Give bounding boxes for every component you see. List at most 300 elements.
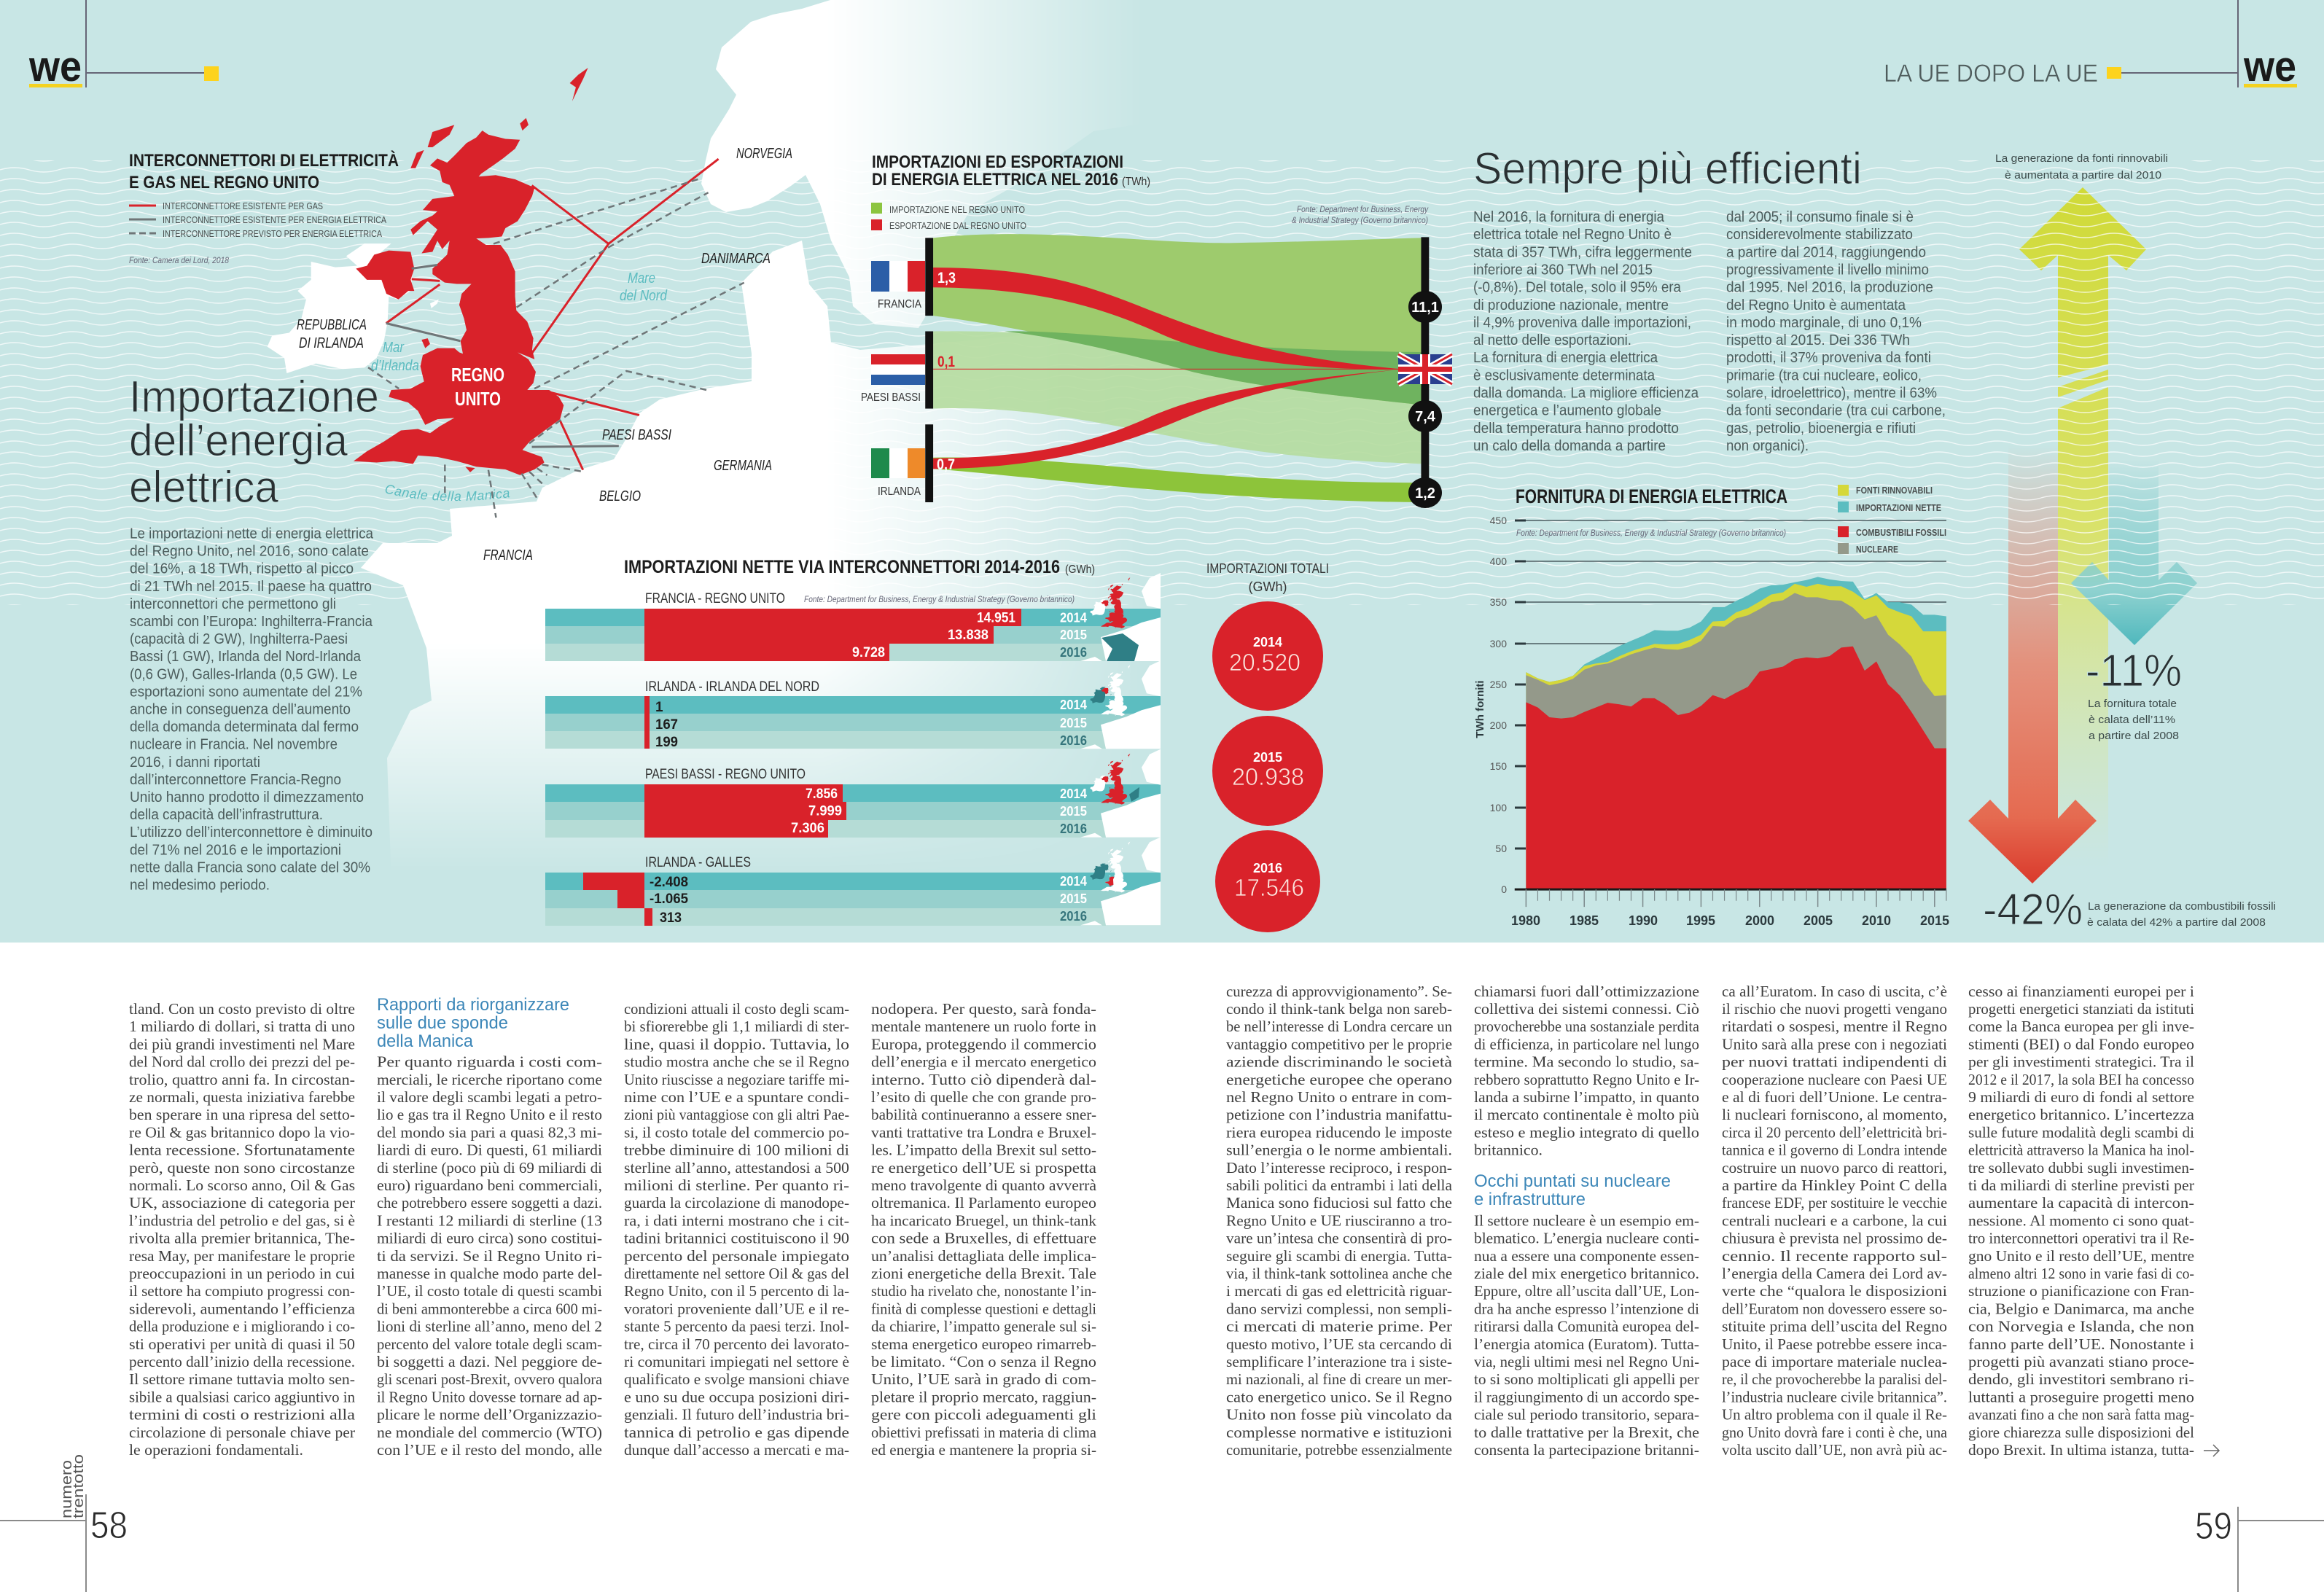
bar group: Irlanda - Galles: -2.408: [650, 875, 688, 890]
text column 8: ti da miliardi di sterline previsti per: [1968, 1177, 2194, 1194]
text column 2: l’UE, il costo totale di questi scambi: [377, 1282, 602, 1300]
text column 2: che potrebbero essere soggetti a dazi.: [377, 1194, 602, 1211]
text column 8: sulle future modalità degli scambi di: [1968, 1123, 2194, 1141]
header left: logo and rule: we: [28, 43, 82, 90]
title: Importazione dell'energia elettrica: [129, 372, 379, 512]
text block: efficiency column 1: è esclusivamente determinata: [1473, 367, 1656, 383]
bar group: Francia - Regno Unito: 2016: [1060, 645, 1087, 660]
callout: minus 11 percent: a partire dal 2008: [2089, 730, 2179, 742]
text column 1: lenta recessione. Sfortunatamente: [129, 1142, 355, 1159]
text block: left intro paragraph: Unito hanno prodotto il dimezzamento: [130, 789, 364, 805]
map heading and legend: interconnectors: E GAS NEL REGNO UNITO: [129, 173, 319, 192]
text column 4: finità di complesse questioni e dettagli: [871, 1300, 1096, 1317]
text column 8: dopo Brexit. In ultima istanza, tutta-: [1968, 1441, 2194, 1459]
text block: efficiency column 1: un calo della domanda a partire: [1473, 438, 1666, 454]
text column 7: centrali nucleari e a carbone, la cui: [1722, 1211, 1947, 1229]
text column 4: les. L’impatto della Brexit sul setto-: [871, 1142, 1096, 1159]
bar group: Irlanda - Irlanda del Nord: 2016: [1060, 733, 1087, 748]
text column 6 lower: blematico. L’energia nucleare conti-: [1474, 1230, 1699, 1247]
text column 3: ri comunitari impiegati nel settore è: [624, 1353, 849, 1370]
total badges: right axis: [1408, 291, 1442, 508]
text column 7: cooperazione nucleare con Paesi UE: [1722, 1071, 1947, 1088]
text block: left intro paragraph: del 16%, a 18 TWh, rispetto al picco: [130, 561, 354, 577]
map labels: countries and seas: NORVEGIA: [736, 146, 792, 162]
flag: Ireland: IRLANDA: [878, 485, 921, 498]
text column 6 lower: to dalle trattative per la Brexit, che: [1474, 1424, 1699, 1441]
text column 8: progetti energetici stanziati da istituti: [1968, 1000, 2194, 1018]
text block: efficiency column 2: solare, idroelettrico), mentre il 63%: [1726, 385, 1937, 401]
sankey heading and legend: IMPORTAZIONE NEL REGNO UNITO: [889, 204, 1025, 215]
map heading and legend: interconnectors: INTERCONNETTORE ESISTENTE PER ENERGIA ELETTRICA: [163, 214, 386, 225]
x axis labels: 1995: [1686, 913, 1715, 928]
bar group: Irlanda - Galles: -1.065: [650, 891, 688, 907]
text block: efficiency column 2: progressivamente il livello minimo: [1726, 262, 1929, 278]
text column 8: elettricità attraverso la Manica ha inol-: [1968, 1142, 2194, 1159]
text column 4: re energetico dell’UE si prospetta: [871, 1159, 1096, 1177]
text column 7: Unito, il Paese potrebbe essere inca-: [1722, 1335, 1947, 1353]
text block: efficiency column 1: il 4,9% proveniva dalle importazioni,: [1473, 315, 1691, 331]
circle 2016: 2016: [1253, 861, 1282, 875]
text block: left intro paragraph: scambi con l’Europa: Inghilterra-Francia: [130, 614, 373, 630]
text column 3: studio mostra anche che se il Regno: [624, 1053, 849, 1071]
text column 1: rivolta alla premier britannica, The-: [129, 1230, 355, 1247]
text block: efficiency column 1: al netto delle esportazioni.: [1473, 332, 1631, 348]
text column 1: tland. Con un costo previsto di oltre: [129, 1000, 355, 1018]
page footer left: folio 58: trentotto: [71, 1454, 87, 1518]
flag: France: FRANCIA: [878, 298, 921, 311]
text block: efficiency column 2: considerevolmente stabilizzato: [1726, 227, 1913, 243]
sankey flows: [925, 234, 1429, 508]
sankey heading and legend: IMPORTAZIONI ED ESPORTAZIONI: [872, 152, 1123, 172]
sankey values: 0,7: [937, 456, 955, 473]
panel: total imports circles: IMPORTAZIONI TOTALI: [1206, 561, 1329, 576]
header right: section title and logo: we: [2243, 43, 2296, 90]
text column 5: Manica sono fiduciosi sul fatto che: [1226, 1194, 1452, 1211]
total badges: right axis: 1,2: [1415, 485, 1435, 502]
text column 2: con l’UE e il resto del mondo, alle: [377, 1441, 602, 1459]
map labels: countries and seas: PAESI BASSI: [602, 427, 671, 443]
map labels: countries and seas: d’Irlanda: [371, 358, 419, 374]
x axis labels: [1511, 913, 1949, 928]
map labels: countries and seas: BELGIO: [599, 488, 641, 504]
text column 4: Unito, l’UE sarà in grado di com-: [871, 1370, 1096, 1388]
text column 1: l’industria del petrolio e del gas, si è: [129, 1211, 355, 1229]
bar group: Irlanda - Galles: 313: [660, 910, 682, 926]
text column 3: guarda la circolazione di manodope-: [624, 1194, 849, 1211]
panel: total imports circles: [1206, 561, 1329, 932]
bar group: Irlanda - Irlanda del Nord: [545, 660, 1161, 750]
title: Importazione dell'energia elettrica: dell’energia: [129, 415, 348, 465]
bar group: Francia - Regno Unito: 14.951: [977, 611, 1015, 625]
circle 2015: [1212, 716, 1323, 826]
text column 3: e uno su due occupa posizioni diri-: [624, 1388, 849, 1405]
sankey heading and legend: Fonte: Department for Business, Energy: [1297, 204, 1429, 214]
text column 4: con sede a Bruxelles, di effettuare: [871, 1230, 1096, 1247]
text block: efficiency column 2: dal 1995. Nel 2016, la produzione: [1726, 280, 1933, 296]
text column 5: mi nazionali, al fine di creare un mer-: [1226, 1370, 1452, 1388]
text column 8: 9 miliardi di euro di fondi al settore: [1968, 1088, 2194, 1106]
sankey values: 1,3: [937, 270, 956, 286]
text block: left intro paragraph: esportazioni sono aumentate del 21%: [130, 684, 362, 700]
text column 4: studio ha rivelato che, nonostante l’in-: [871, 1282, 1096, 1300]
circle 2016: 17.546: [1234, 874, 1304, 901]
text block: left intro paragraph: nucleare in Francia. Nel novembre: [130, 737, 338, 753]
bar group: Irlanda - Irlanda del Nord: 167: [655, 717, 678, 733]
text block: left intro paragraph: dall’interconnettore Francia-Regno: [130, 772, 341, 788]
bar group: Irlanda - Irlanda del Nord: IRLANDA - IRLANDA DEL NORD: [645, 679, 819, 695]
flag: United Kingdom: [1398, 354, 1452, 384]
x axis labels: 2000: [1745, 913, 1774, 928]
text column 1: UK, associazione di categoria per: [129, 1194, 355, 1211]
text block: left intro paragraph: del Regno Unito, nel 2016, sono calate: [130, 544, 369, 560]
text column 8: almeno altri 12 sono in varie fasi di co-: [1968, 1265, 2194, 1282]
text column 3: ra, i dati interni mostrano che i cit-: [624, 1211, 849, 1229]
circle 2016: [1215, 830, 1320, 932]
panel: Sankey imports and exports 2016: [861, 152, 1452, 508]
panel: total imports circles: (GWh): [1248, 580, 1287, 594]
text column 8: struzione o pianificazione con Fran-: [1968, 1282, 2194, 1300]
text column 1: resa May, per manifestare le proprie: [129, 1247, 355, 1265]
text column 7: li nucleari forniscono, al momento,: [1722, 1106, 1947, 1123]
text block: efficiency column 2: [1726, 209, 1946, 454]
text block: efficiency column 2: in modo marginale, di uno 0,1%: [1726, 315, 1922, 331]
chart heading and source: Fonte: Department for Business, Energy & Industrial Strategy (Governo britannico): [1516, 528, 1786, 538]
callout: minus 42 percent: La generazione da combustibili fossili: [2088, 900, 2276, 913]
panel: net imports via interconnectors bar chart: [545, 557, 1161, 926]
text column 8: tro interconnettori operativi tra il Re-: [1968, 1230, 2194, 1247]
callout: minus 11 percent: [2086, 646, 2182, 742]
text column 3: direttamente nel settore Oil & gas del: [624, 1265, 849, 1282]
x axis labels: 1985: [1570, 913, 1599, 928]
text block: efficiency column 2: primarie (tra cui nucleare, eolico,: [1726, 367, 1922, 383]
text column 6 lower: nua a essere una componente essen-: [1474, 1247, 1699, 1265]
chart legend: [1838, 485, 1946, 555]
bar group: Paesi Bassi - Regno Unito: 7.856: [806, 787, 838, 802]
text block: efficiency column 2: a partire dal 2014, raggiungendo: [1726, 244, 1926, 260]
chart legend: COMBUSTIBILI FOSSILI: [1856, 527, 1946, 538]
chart heading and source: [1516, 485, 1787, 538]
text column 1: ben sperare in una ripresa del setto-: [129, 1106, 355, 1123]
text column 4: da chiarire, l’impatto generale sul si-: [871, 1318, 1096, 1335]
text column 7: circa il 20 percento dell’elettricità bri-: [1722, 1123, 1947, 1141]
page footer left: folio 58: [0, 1454, 128, 1592]
text column 8: stimenti (BEI) o dal Fondo europeo: [1968, 1035, 2194, 1053]
bar group: Irlanda - Irlanda del Nord: 2015: [1060, 716, 1087, 730]
text block: efficiency column 1: stata di 357 TWh, cifra leggermente: [1473, 244, 1692, 260]
text column 5: aziende discriminando le società: [1226, 1053, 1453, 1071]
map heading and legend: interconnectors: [129, 150, 399, 265]
text column 6 lower: ziale del mix energetico britannico.: [1474, 1265, 1699, 1282]
text column 7: ritardati o sospesi, mentre il Regno: [1722, 1018, 1947, 1035]
text column 6 lower: ciale sul periodo transitorio, separa-: [1474, 1406, 1699, 1424]
text block: efficiency column 2: rispetto al 2015. Dei 336 TWh: [1726, 332, 1910, 348]
text column 8: giore chiarezza sulle disposizioni del: [1968, 1424, 2194, 1441]
text column 3: voratori proveniente dall’UE e il re-: [624, 1300, 849, 1317]
text column 5: be nell’interesse di Londra cercare un: [1226, 1018, 1452, 1035]
text column 7: e al di fuori dell’Unione. Le centra-: [1722, 1088, 1947, 1106]
text column 2: gli scenari post-Brexit, ovvero qualora: [377, 1370, 602, 1388]
section heading: Rapporti da riorganizzare: Rapporti da riorganizzare: [377, 995, 569, 1015]
flag: Netherlands: [861, 354, 925, 404]
text column 8: con Norvegia e Islanda, che non: [1968, 1318, 2194, 1335]
text column 6 upper: britannico.: [1474, 1142, 1543, 1159]
text column 4: ed energia e mantenere la propria si-: [871, 1441, 1096, 1459]
text column 5: cato energetico unico. Se il Regno: [1226, 1388, 1452, 1405]
text column 5: vare un’intesa che consentirà di pro-: [1226, 1230, 1452, 1247]
flag: Netherlands: PAESI BASSI: [861, 391, 921, 404]
text column 7: il rischio che nuovi progetti vengano: [1722, 1000, 1947, 1018]
y axis labels: 450: [1490, 515, 1507, 526]
sankey heading and legend: & Industrial Strategy (Governo britannico): [1292, 215, 1428, 225]
text column 3: condizioni attuali il costo degli scam-: [624, 1000, 849, 1018]
callout: minus 11 percent: è calata dell’11%: [2089, 714, 2175, 726]
text column 8: per gli investimenti strategici. Tra il: [1968, 1053, 2194, 1071]
text column 5: semplificare l’interazione tra i siste-: [1226, 1353, 1452, 1370]
bar group: Francia - Regno Unito: [545, 573, 1161, 661]
y axis labels: [1474, 515, 1507, 895]
text column 6 lower: to si sono moltiplicati gli appelli per: [1474, 1370, 1699, 1388]
callout: minus 42 percent: è calata del 42% a partire dal 2008: [2087, 916, 2266, 929]
text block: efficiency column 1: (-0,8%). Del totale, solo il 95% era: [1473, 280, 1682, 296]
map labels: countries and seas: UNITO: [455, 388, 501, 410]
text column 6 lower: consenta la partecipazione britanni-: [1474, 1441, 1699, 1459]
text column 6 lower: il raggiungimento di un accordo spe-: [1474, 1388, 1699, 1405]
text column 3: zioni più vantaggiose con gli altri Pae-: [624, 1106, 849, 1123]
text column 3: milioni di sterline. Per quanto ri-: [624, 1177, 849, 1194]
text column 6 lower: ritirarsi dalla Comunità europea del-: [1474, 1318, 1699, 1335]
text column 3: dunque dall’accesso a mercati e ma-: [624, 1441, 849, 1459]
text column 3: percento del personale impiegato: [624, 1247, 849, 1265]
text column 2: [377, 1053, 602, 1459]
text column 2: miliardi di euro circa) sono costitui-: [377, 1230, 602, 1247]
sankey heading and legend: (TWh): [1122, 176, 1150, 188]
section heading: Rapporti da riorganizzare: della Manica: [377, 1031, 474, 1051]
text column 2: di sterline (poco più di 69 miliardi di: [377, 1159, 602, 1177]
text column 7: Un altro problema con il quale il Re-: [1722, 1406, 1947, 1424]
text column 2: lio e gas tra il Regno Unito e il resto: [377, 1106, 602, 1123]
title: Sempre più efficienti: Sempre più efficienti: [1473, 144, 1862, 193]
text column 6 lower: Eppure, oltre all’uscita dall’UE, Lon-: [1474, 1282, 1699, 1300]
text column 1: ze normali, questa iniziativa farebbe: [129, 1088, 355, 1106]
text block: left intro paragraph: della domanda determinata dal fermo: [130, 719, 359, 735]
text column 5: Dato l’interesse reciproco, i respon-: [1226, 1159, 1452, 1177]
text column 8: gno Unito e il resto dell’UE, mentre: [1968, 1247, 2194, 1265]
text column 8: nessione. Al momento ci sono quat-: [1968, 1211, 2194, 1229]
y axis labels: 350: [1490, 596, 1507, 608]
text column 8: dendo, gli investitori sembrano ri-: [1968, 1370, 2194, 1388]
callout: minus 42 percent: -42%: [1983, 885, 2083, 934]
text block: efficiency column 1: La fornitura di energia elettrica: [1473, 350, 1658, 366]
text column 6 lower: dra ha anche espresso l’intenzione di: [1474, 1300, 1699, 1317]
text column 7: cennio. Il recente rapporto sul-: [1722, 1247, 1947, 1265]
text column 5: curezza di approvvigionamento”. Se-: [1226, 983, 1452, 1000]
page footer right: folio 59: 59: [2195, 1505, 2232, 1548]
bar group: Irlanda - Irlanda del Nord: 1: [655, 700, 663, 715]
text column 7: pace di importare materiale nuclea-: [1722, 1353, 1947, 1370]
x axis labels: 2005: [1804, 913, 1833, 928]
text column 2: il valore degli scambi legati a petro-: [377, 1088, 602, 1106]
callout: renewables increase: La generazione da fonti rinnovabili: [1995, 152, 2168, 165]
text column 3: Regno Unito, con il 5 percento di la-: [624, 1282, 849, 1300]
callout: renewables increase: [1995, 152, 2168, 182]
circle 2015: 20.938: [1232, 763, 1304, 790]
bar chart heading: (GWh): [1065, 563, 1095, 576]
bar chart heading: IMPORTAZIONI NETTE VIA INTERCONNETTORI 2014-2016: [624, 557, 1060, 577]
text column 3: trebbe diminuire di 100 milioni di: [624, 1142, 849, 1159]
panel: electricity supply area chart: [1474, 485, 1949, 928]
text column 1: sti operativi per unità di quasi il 50: [129, 1335, 355, 1353]
text column 6 upper: chiamarsi fuori dall’ottimizzazione: [1474, 983, 1699, 1000]
map labels: countries and seas: Mare: [628, 270, 655, 286]
callout: renewables increase: è aumentata a partire dal 2010: [2005, 169, 2161, 182]
bar group: Irlanda - Irlanda del Nord: 199: [655, 735, 678, 750]
text block: efficiency column 1: dalla domanda. La migliore efficienza: [1473, 385, 1699, 401]
text column 7: Unito sarà alla prese con i negoziati: [1722, 1035, 1947, 1053]
text column 1: normali. Lo scorso anno, Oil & Gas: [129, 1177, 355, 1194]
title: Importazione dell'energia elettrica: Importazione: [129, 372, 379, 421]
text column 1: dei più grandi investimenti nel Mare: [129, 1035, 355, 1053]
text column 5: sabili politici da entrambi i lati della: [1226, 1177, 1452, 1194]
text column 7: ca all’Euratom. In caso di uscita, c’è: [1722, 983, 1947, 1000]
text block: efficiency column 2: gas, petrolio, bioenergia e rifiuti: [1726, 421, 1916, 437]
map: European land masses: [361, 0, 1093, 837]
text column 6 lower: via, negli ultimi mesi nel Regno Uni-: [1474, 1353, 1699, 1370]
chart gridlines and axes: [1515, 520, 1946, 848]
text block: efficiency column 2: non organici).: [1726, 438, 1809, 454]
y axis labels: 0: [1501, 883, 1507, 895]
map labels: countries and seas: del Nord: [620, 288, 668, 304]
flag: Ireland: [871, 448, 925, 498]
text block: left intro paragraph: L’utilizzo dell’interconnettore è diminuito: [130, 824, 373, 840]
bar group: Paesi Bassi - Regno Unito: 2014: [1060, 787, 1087, 801]
text block: efficiency column 2: dal 2005; il consumo finale si è: [1726, 209, 1914, 225]
text column 6 upper: termine. Ma secondo lo studio, sa-: [1474, 1053, 1699, 1071]
text column 7: re, il che provocherebbe la paralisi del-: [1722, 1370, 1947, 1388]
text column 2: plicare le norme dell’Organizzazio-: [377, 1406, 602, 1424]
text column 7: verte che “qualora le disposizioni: [1722, 1282, 1947, 1300]
arrow: renewables up: [2019, 187, 2146, 867]
text column 1: sibile a qualsiasi carico aggiuntivo in: [129, 1388, 355, 1405]
text column 8: come la Banca europea per gli inve-: [1968, 1018, 2194, 1035]
x axis labels: 2015: [1920, 913, 1949, 928]
section heading: Occhi puntati su nucleare: e infrastrutture: [1474, 1190, 1586, 1209]
text column 7: l’industria nucleare civile britannica”.: [1722, 1388, 1947, 1405]
map: Republic of Ireland: [268, 243, 439, 373]
text column 1: preoccupazioni in un periodo in cui: [129, 1265, 355, 1282]
bar group: Irlanda - Galles: IRLANDA - GALLES: [645, 855, 751, 870]
text block: left intro paragraph: interconnettori che permettono gli: [130, 596, 336, 612]
text column 8: 2012 e il 2017, la sola BEI ha concesso: [1968, 1071, 2194, 1088]
text column 4: be limitato. “Con o senza il Regno: [871, 1353, 1096, 1370]
text column 4: oltremanica. Il Parlamento europeo: [871, 1194, 1096, 1211]
map labels: countries and seas: [297, 146, 792, 563]
text column 4: interno. Tutto ciò dipenderà dal-: [871, 1071, 1096, 1088]
bar group: Paesi Bassi - Regno Unito: 2015: [1060, 804, 1087, 819]
section heading: Rapporti da riorganizzare: [377, 995, 569, 1051]
bar group: Francia - Regno Unito: FRANCIA - REGNO UNITO: [645, 591, 785, 606]
text column 7: volta uscito dall’UE, non avrà più ac-: [1722, 1441, 1947, 1459]
text column 5: questo motivo, l’UE sta cercando di: [1226, 1335, 1452, 1353]
text column 6 lower: [1474, 1211, 1699, 1459]
text column 2: Per quanto riguarda i costi com-: [377, 1053, 602, 1071]
text column 7: chiusura è prevista nel prossimo de-: [1722, 1230, 1947, 1247]
text column 5: comunitarie, potrebbe essenzialmente: [1226, 1441, 1452, 1459]
circle 2014: [1212, 601, 1323, 711]
text column 4: un’analisi dettagliata delle implica-: [871, 1247, 1096, 1265]
header right: section title and logo: LA UE DOPO LA UE: [1884, 60, 2098, 87]
y axis labels: 50: [1495, 843, 1507, 854]
text column 4: pletare il proprio mercato, raggiun-: [871, 1388, 1096, 1405]
text block: efficiency column 2: da fonti secondarie (tra cui carbone,: [1726, 403, 1946, 419]
text column 3: tre, circa il 70 percento dei lavorato-: [624, 1335, 849, 1353]
chart heading and source: FORNITURA DI ENERGIA ELETTRICA: [1516, 485, 1787, 507]
text column 5: complesse normative e istituzioni: [1226, 1424, 1452, 1441]
callout: minus 11 percent: -11%: [2086, 646, 2182, 696]
text block: left intro paragraph: (0,6 GW), Galles-Irlanda (0,5 GW). Le: [130, 666, 357, 682]
circle 2014: 2014: [1253, 635, 1282, 649]
text column 5: petizione con l’industria manifattu-: [1226, 1106, 1452, 1123]
map labels: countries and seas: DI IRLANDA: [299, 335, 364, 351]
text column 4: vanti trattative tra Londra e Bruxel-: [871, 1123, 1096, 1141]
text column 4: Europa, proteggendo il commercio: [871, 1035, 1096, 1053]
text column 7: dell’Euratom non dovessero essere so-: [1722, 1300, 1947, 1317]
text block: efficiency column 1: energetica e l’aumento globale: [1473, 403, 1661, 419]
page footer left: folio 58: 58: [90, 1505, 128, 1547]
header right: section title and logo: [1884, 0, 2297, 90]
total badges: right axis: 11,1: [1411, 300, 1439, 316]
text column 4: obiettivi prefissati in materia di clima: [871, 1424, 1096, 1441]
text column 2: ne mondiale del commercio (WTO): [377, 1424, 602, 1441]
arrow: continue reading: [2204, 1445, 2219, 1456]
bar group: Irlanda - Galles: [545, 837, 1161, 926]
text column 8: progetti più avanzati stiano proce-: [1968, 1353, 2194, 1370]
text column 7: tannica e il governo di Londra intende: [1722, 1142, 1947, 1159]
x axis labels: 1990: [1629, 913, 1658, 928]
text column 4: l’esito di quelle che con grande pro-: [871, 1088, 1096, 1106]
sankey heading and legend: ESPORTAZIONE DAL REGNO UNITO: [889, 220, 1026, 231]
text column 8: aumentare la capacità di intercon-: [1968, 1194, 2194, 1211]
arrow: fossil fuels down: [1968, 445, 2097, 883]
text column 4: meno travolgente di quanto avverrà: [871, 1177, 1096, 1194]
text column 3: tannica di petrolio e gas dipende: [624, 1424, 849, 1441]
flag: France: [871, 261, 925, 311]
text column 8: cia, Belgio e Danimarca, ma anche: [1968, 1300, 2194, 1317]
bar group: Francia - Regno Unito: 13.838: [948, 628, 989, 643]
text column 5: [1226, 983, 1453, 1459]
text column 2: ti da servizi. Se il Regno Unito ri-: [377, 1247, 602, 1265]
text column 4: mentale mantenere un ruolo forte in: [871, 1018, 1096, 1035]
text column 5: energetiche europee che operano: [1226, 1071, 1452, 1088]
page footer left: folio 58: numero: [59, 1460, 75, 1518]
text column 3: tadini britannici costituiscono il 90: [624, 1230, 849, 1247]
wave pattern area: [0, 160, 2324, 605]
sankey heading and legend: DI ENERGIA ELETTRICA NEL 2016: [872, 170, 1118, 190]
text block: efficiency column 1: di produzione nazionale, mentre: [1473, 297, 1669, 313]
chart legend: FONTI RINNOVABILI: [1856, 485, 1933, 496]
text column 3: stante 5 percento da paesi terzi. Inol-: [624, 1318, 849, 1335]
text column 2: percento del valore totale degli scam-: [377, 1335, 602, 1353]
sankey values: 0,1: [937, 354, 955, 370]
text block: left intro paragraph: nel medesimo periodo.: [130, 878, 270, 894]
text column 1: siderevoli, aumentando l’efficienza: [129, 1300, 355, 1317]
text block: left intro paragraph: (capacità di 2 GW), Inghilterra-Paesi: [130, 631, 348, 647]
text column 5: nel Regno Unito o entrare in com-: [1226, 1088, 1452, 1106]
text column 5: Regno Unito e UE riusciranno a tro-: [1226, 1211, 1452, 1229]
map: United Kingdom and interconnectors: [354, 68, 744, 518]
panel: teal infographic background: [0, 0, 2324, 943]
text column 2: I restanti 12 miliardi di sterline (13: [377, 1211, 602, 1229]
text column 5: i mercati di gas ed elettricità riguar-: [1226, 1282, 1452, 1300]
